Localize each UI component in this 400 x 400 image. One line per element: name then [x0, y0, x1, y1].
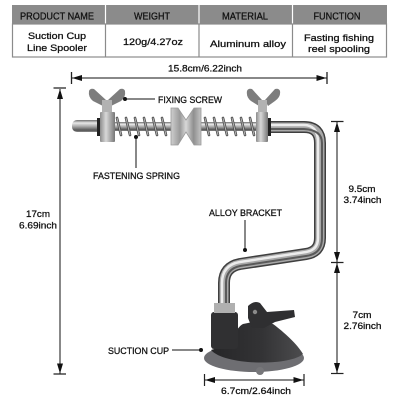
- dimension: lower bracket height: [331, 263, 382, 374]
- suction cup base: [204, 303, 304, 375]
- label: suction cup: SUCTION CUP: [108, 346, 169, 357]
- alloy bracket arm: [222, 125, 322, 305]
- table header row: [12, 5, 387, 24]
- left wing screw: [89, 89, 125, 142]
- dimension: base width: 6.7cm/2.64inch: [221, 386, 291, 397]
- dimension: base width: [204, 374, 304, 397]
- label: fastening spring: FASTENING SPRING: [93, 171, 180, 182]
- dimension: overall width: 15.8cm/6.22inch: [168, 64, 242, 74]
- center spool guide: [171, 108, 201, 145]
- spec table: [12, 5, 387, 57]
- dimension: upper bracket height: [331, 122, 382, 262]
- table header row: WEIGHT: [134, 10, 170, 22]
- label: fastening spring: [93, 135, 180, 182]
- table value row: Aluminum alloy: [210, 39, 286, 50]
- right wing screw: [247, 89, 280, 142]
- label: alloy bracket: ALLOY BRACKET: [209, 208, 282, 219]
- table header row: MATERIAL: [222, 10, 268, 22]
- spool rod left end: [72, 120, 102, 132]
- product: line spooler: [72, 89, 322, 375]
- dimension: overall height: 6.69inch: [19, 220, 57, 232]
- spool rod shaft: [100, 122, 270, 131]
- label: alloy bracket: [209, 208, 282, 252]
- table value row: 120g/4.27oz: [123, 37, 183, 48]
- suction lever: [248, 302, 295, 328]
- label: fixing screw: [123, 95, 222, 106]
- dimension: overall height: 17cm: [26, 209, 50, 220]
- dimension: upper bracket height: 3.74inch: [344, 195, 382, 206]
- dimension: upper bracket height: 9.5cm: [348, 184, 376, 195]
- right fastening spring: [205, 118, 254, 135]
- left fastening spring: [117, 118, 166, 135]
- table value row: Suction Cup: [28, 31, 86, 42]
- dimension: overall width: [72, 64, 327, 84]
- table header row: FUNCTION: [314, 10, 360, 22]
- label: suction cup: [108, 346, 203, 357]
- table value row: Line Spooler: [27, 43, 87, 54]
- table value row: reel spooling: [308, 44, 370, 55]
- dimension: overall height: [19, 88, 66, 374]
- dimension: lower bracket height: 2.76inch: [344, 321, 382, 332]
- table value row: [12, 24, 386, 57]
- dimension: lower bracket height: 7cm: [352, 310, 372, 321]
- table value row: Fasting fishing: [304, 33, 374, 44]
- table header row: PRODUCT NAME: [20, 10, 94, 22]
- label: fixing screw: FIXING SCREW: [158, 95, 222, 106]
